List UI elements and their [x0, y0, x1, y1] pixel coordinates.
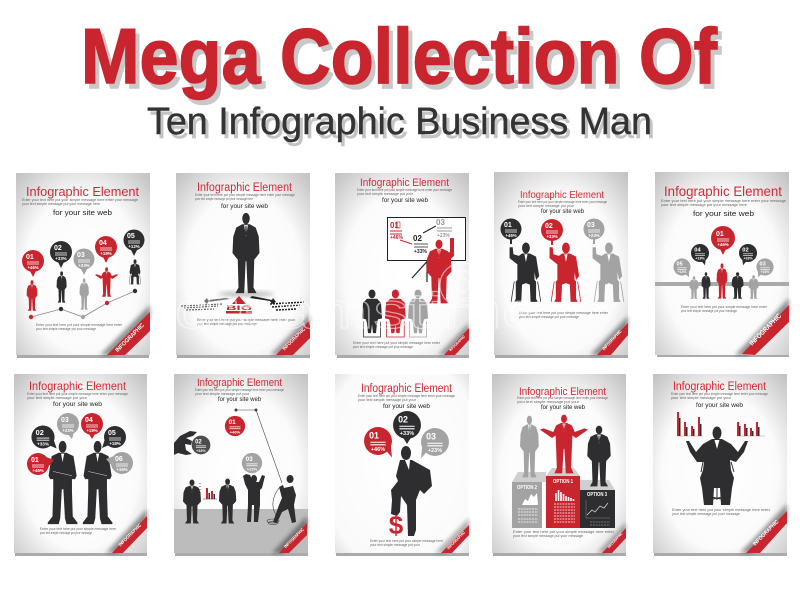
card 9 option 1 column: OPTION 1	[553, 479, 573, 485]
card 1 bubbles: 03	[77, 252, 85, 259]
card 6 bubbles: 06	[115, 456, 123, 463]
card 1 bubbles: 01	[26, 254, 34, 261]
card 5 bubbles	[673, 226, 774, 277]
card 7 hand with bubble	[174, 431, 210, 455]
card 1 footer text: your text simple message put your message	[36, 327, 96, 331]
card 8 ribbon: INFOGRAPHIC	[446, 530, 466, 550]
card 3 ribbon: INFOGRAPHIC	[448, 334, 466, 352]
card 4 footer text: Enter your text here put your simple message here enter	[519, 311, 609, 315]
card 9 footer text: your text simple message put your message	[513, 534, 583, 538]
card 3 board: 03	[436, 218, 445, 227]
card 3 footer text: your text simple message put your message	[353, 345, 413, 349]
panel: card 10 seated man with charts	[653, 374, 787, 556]
card 5 intro text: your text simple message put your message here	[661, 203, 747, 207]
card 9 intro text: Enter your text here put your simple message here enter your message	[517, 396, 608, 400]
card 3 board: 02	[413, 234, 422, 243]
panel: card 3 presentation	[335, 173, 469, 358]
card 3 intro text: Enter your text here put your simple message here enter your message	[357, 188, 452, 192]
card 7 grey floor	[174, 509, 308, 553]
card 1 bubbles: 02	[54, 245, 62, 252]
card 2 footer text: Enter your text here put your simple message here enter your	[197, 318, 296, 322]
card 1 ribbon	[100, 305, 150, 355]
card 3 board: +23%	[437, 233, 450, 239]
card 7 red bubble	[225, 416, 245, 436]
card 2 tagline: for your site web	[221, 204, 269, 210]
card 8 tagline: for your site web	[383, 403, 431, 410]
card 5 tagline: for your site web	[693, 209, 754, 218]
card 7 intro text: Enter your text here put your simple message here enter your message	[195, 388, 284, 392]
card 5 figures	[690, 263, 759, 299]
card 8 footer text: Enter your text here put your simple message here	[370, 539, 443, 543]
card 8 heading: Infographic Element	[361, 383, 453, 395]
card 4 figures	[510, 243, 624, 302]
card 4 bubbles: +33%	[546, 234, 558, 239]
card 3 intro text: your text simple message put your	[357, 192, 414, 196]
card 7 grey bubble: 03	[246, 456, 253, 463]
panel: card 1 timeline	[16, 173, 150, 358]
card 9 option 2 column	[512, 482, 542, 528]
card 10 left bar chart	[677, 412, 703, 436]
card 10 footer text: your text simple message put your message	[672, 512, 740, 516]
card 8 footer text: your text simple message put your	[370, 543, 421, 547]
subtitle shadow: Ten Infographic Business Man	[150, 105, 655, 147]
card 10 ribbon: INFOGRAPHIC	[752, 519, 780, 547]
card 10 intro text: your text simple message put your	[671, 396, 732, 400]
card 7 red bubble: 01	[229, 419, 236, 426]
card 8 bubbles: 03	[426, 431, 436, 441]
card 1 intro text	[22, 198, 138, 206]
card 6 ribbon: INFOGRAPHIC	[118, 522, 143, 547]
card 7 grey bubble	[242, 453, 262, 473]
card 1 bubbles: 05	[127, 233, 135, 240]
card 4 bubbles: 03	[587, 222, 595, 229]
card 2 ribbon: INFOGRAPHIC	[282, 326, 307, 352]
card 1 ribbon: INFOGRAPHIC	[115, 322, 146, 354]
card 4 footer text	[519, 311, 609, 319]
card 6 bubbles: +18%	[109, 441, 121, 446]
card 1 figures	[27, 259, 141, 311]
card 1 footer text	[36, 323, 123, 331]
card 1 bubbles: +19%	[100, 251, 112, 256]
card 7 heading: Infographic Element	[197, 377, 282, 389]
card 9 option 3 column	[580, 490, 615, 528]
card 1 bubbles: +33%	[55, 256, 67, 261]
card 8 intro text: Enter your text here put your simple message here enter your message	[358, 394, 455, 398]
card 3 board: +46%	[390, 235, 403, 241]
card 4 intro text: Enter your text here put your simple message here enter your message	[518, 200, 607, 204]
card 10 intro text: Enter your text here put your simple message here enter your message	[671, 392, 768, 396]
card 8 bubbles: +46%	[371, 447, 385, 453]
card 4 bubbles: +46%	[505, 233, 517, 238]
card 5 bubbles: +46%	[717, 242, 729, 247]
watermark: dreamstime.	[175, 283, 560, 339]
card 10 footer text: Enter your text here put your simple message here enter	[672, 508, 771, 512]
card 6 ribbon	[106, 509, 147, 553]
card 6 footer text: Enter your text here put your simple message here	[40, 527, 116, 531]
card 8 ribbon	[435, 518, 469, 553]
card 6 bubbles: 03	[61, 417, 69, 424]
card 8 intro text	[358, 394, 455, 402]
card 3 audience	[362, 289, 428, 337]
card 1 heading: Infographic Element	[26, 184, 139, 199]
card 4 bubbles: 01	[504, 222, 512, 229]
card 10 heading: Infographic Element	[673, 381, 767, 393]
card 6 bubbles: +23%	[62, 428, 74, 433]
card 3 intro text	[357, 188, 452, 196]
card 4 ribbon: INFOGRAPHIC	[601, 328, 623, 351]
card 2 option labels	[181, 302, 304, 314]
card 2 arrows	[204, 296, 276, 304]
card 3 footer text	[353, 341, 441, 349]
card 9 ribbon: INFOGRAPHIC	[607, 531, 624, 549]
panel: card 5 team line-up	[655, 172, 789, 357]
card 3 heading: Infographic Element	[360, 177, 449, 189]
card 6 bubbles: +19%	[86, 428, 98, 433]
card 8 bubbles	[364, 411, 449, 459]
panel: card 4 seated men	[494, 172, 628, 358]
card 6 bubbles: +46%	[32, 468, 44, 473]
card 2 footer text: your text simple message put your message	[197, 322, 257, 326]
subtitle: Ten Infographic Business Man	[147, 101, 652, 143]
card 7 hand with bubble: +33%	[196, 449, 207, 453]
panel: card 7 teamwork scene	[174, 374, 308, 556]
card 3 pointer	[412, 255, 433, 282]
card 9 intro text	[517, 396, 608, 404]
card 4 footer text: your text simple message put your message	[519, 315, 579, 319]
panel: card 2 single man	[176, 173, 310, 358]
card 4 bubbles	[500, 218, 604, 245]
card 6 footer text	[40, 527, 116, 535]
card 5 footer text: your text simple message put your message	[681, 309, 737, 313]
card 4 tagline: for your site web	[541, 209, 585, 215]
card 7 hand with bubble: 02	[195, 439, 202, 445]
card 2 intro text: Enter your text here put your simple message here enter your message	[195, 193, 295, 197]
panel: card 6 two partners	[14, 374, 147, 556]
card 3 tagline: for your site web	[382, 198, 429, 204]
card 6 intro text: Enter your text here put your simple message here enter your message	[27, 392, 128, 396]
card 1 intro text: your text simple message put your message here	[22, 202, 100, 206]
card 8 man	[391, 446, 432, 536]
card 2 intro text: your text simple message put your message here	[195, 197, 253, 201]
card 7 intro text	[195, 388, 284, 396]
card 6 tagline: for your site web	[53, 401, 102, 408]
card 7 rope	[235, 409, 282, 525]
card 2 footer text	[197, 318, 296, 326]
card 1 intro text: Enter your text here put your simple message here enter your message	[22, 198, 138, 202]
card 9 intro text: your text simple message put your	[517, 400, 580, 404]
card 4 intro text	[518, 200, 607, 208]
card 4 heading: Infographic Element	[520, 189, 604, 201]
card 9 option 3 column: OPTION 3	[587, 492, 607, 498]
card 9 podium tops	[512, 468, 615, 490]
card 7 red bubble: +46%	[230, 429, 241, 434]
card 7 intro text: your text simple message put your	[195, 392, 250, 396]
card 6 bubbles	[27, 413, 133, 475]
card 6 heading: Infographic Element	[29, 379, 127, 393]
card 6 bubbles: +33%	[37, 441, 49, 446]
card 7 figures	[183, 474, 296, 524]
card 4 ribbon	[590, 316, 628, 355]
card 1 line chart	[29, 289, 137, 319]
card 5 bubbles: +19%	[695, 257, 705, 261]
card 7 grey bubble: +23%	[247, 466, 258, 471]
card 9 figures	[520, 415, 611, 486]
card 4 intro text: your text simple message put your	[518, 204, 575, 208]
card 5 bubbles: 05	[677, 261, 683, 267]
card 3 board	[388, 218, 466, 260]
card 8 dollar icon: $	[389, 510, 404, 540]
card 5 footer text	[681, 305, 768, 313]
card 5 bubbles: +23%	[761, 270, 769, 274]
card 5 heading: Infographic Element	[664, 183, 782, 199]
title: Mega Collection Of	[81, 12, 718, 100]
card 1 tagline: for your site web	[53, 210, 112, 217]
card 6 intro text: your text simple message put your	[27, 396, 88, 400]
card 6 bubbles: 05	[108, 430, 116, 437]
card 6 bubbles: +16%	[116, 467, 128, 472]
watermark	[175, 263, 560, 339]
card 3 footer text: Enter your text here put your simple message here enter	[353, 341, 441, 345]
card 5 bubbles: +12%	[678, 270, 686, 274]
card 5 bubbles: 01	[716, 231, 724, 238]
panel: card 8 man with dollar	[335, 374, 469, 556]
card 2 ribbon	[270, 314, 310, 355]
card 5 bubbles: 02	[742, 247, 749, 253]
card 4 bubbles: 02	[545, 223, 553, 230]
card 8 intro text: your text simple message put your	[358, 398, 417, 402]
card 3 presenter	[426, 238, 454, 303]
card 1 bubbles: +23%	[78, 263, 90, 268]
card 2 floor shadow	[218, 291, 274, 297]
card 3 board: +33%	[414, 249, 427, 255]
card 3 ribbon	[438, 323, 469, 355]
card 6 bubbles: 04	[85, 417, 93, 424]
panel: card 9 podium	[492, 374, 626, 556]
card 9 option 1 column	[546, 476, 580, 528]
card 8 bubbles: 02	[398, 414, 408, 424]
title shadow: Mega Collection Of	[85, 17, 722, 105]
card 9 tagline: for your site web	[541, 405, 586, 411]
card 5 footer text: Enter your text here put your simple message here enter	[681, 305, 768, 309]
card 1 bubbles: +46%	[27, 265, 39, 270]
card 1 bubbles	[22, 230, 144, 277]
card 10 intro text	[671, 392, 768, 400]
card 1 bubbles: +12%	[128, 244, 140, 249]
card 10 seated man	[686, 426, 748, 505]
card 4 bubbles: +23%	[588, 233, 600, 238]
card 10 right bar chart	[737, 422, 765, 436]
card 7 tagline: for your site web	[218, 397, 262, 403]
card 10 tagline: for your site web	[696, 402, 744, 409]
card 1 bubbles: 04	[99, 240, 107, 247]
card 9 option 2 column: OPTION 2	[517, 485, 537, 491]
card 3 board: 01	[390, 221, 399, 230]
card 9 footer text: Enter your text here put your simple message here enter	[513, 530, 615, 534]
card 7 ribbon	[272, 516, 307, 553]
card 8 bubbles: 01	[369, 430, 379, 440]
card 8 footer text	[370, 539, 443, 547]
card 10 footer text	[672, 508, 771, 516]
card 5 intro text	[661, 199, 786, 207]
card 5 bubbles: 04	[694, 247, 701, 253]
card 6 bubbles: 02	[36, 428, 44, 437]
card 1 footer text: Enter your text here put your simple message here enter	[36, 323, 123, 327]
card 8 bubbles: +33%	[400, 431, 414, 437]
card 5 bubbles: +33%	[743, 257, 753, 261]
card 2 option labels: BIG	[226, 306, 253, 312]
card 9 heading: Infographic Element	[519, 386, 606, 398]
card 9 footer text	[513, 530, 615, 538]
card 7 bar chart	[200, 483, 217, 499]
card 7 ribbon: INFOGRAPHIC	[283, 527, 305, 549]
card 2 heading: Infographic Element	[197, 182, 293, 194]
card 9 ribbon	[597, 522, 626, 553]
card 6 footer text: your text simple message put your message	[40, 531, 92, 535]
card 5 ribbon	[735, 298, 789, 355]
card 5 bubbles: 03	[760, 261, 766, 267]
card 5 intro text: Enter your text here put your simple message here enter your message	[661, 199, 786, 203]
card 6 figures	[48, 441, 112, 524]
card 10 ribbon	[740, 504, 787, 553]
card 2 man	[232, 213, 260, 293]
card 2 intro text	[195, 193, 295, 201]
card 8 bubbles: +23%	[428, 448, 442, 454]
card 5 floor band	[655, 282, 789, 286]
card 6 intro text	[27, 392, 128, 400]
card 5 ribbon: INFOGRAPHIC	[749, 313, 783, 347]
card 6 bubbles: 01	[31, 457, 39, 464]
